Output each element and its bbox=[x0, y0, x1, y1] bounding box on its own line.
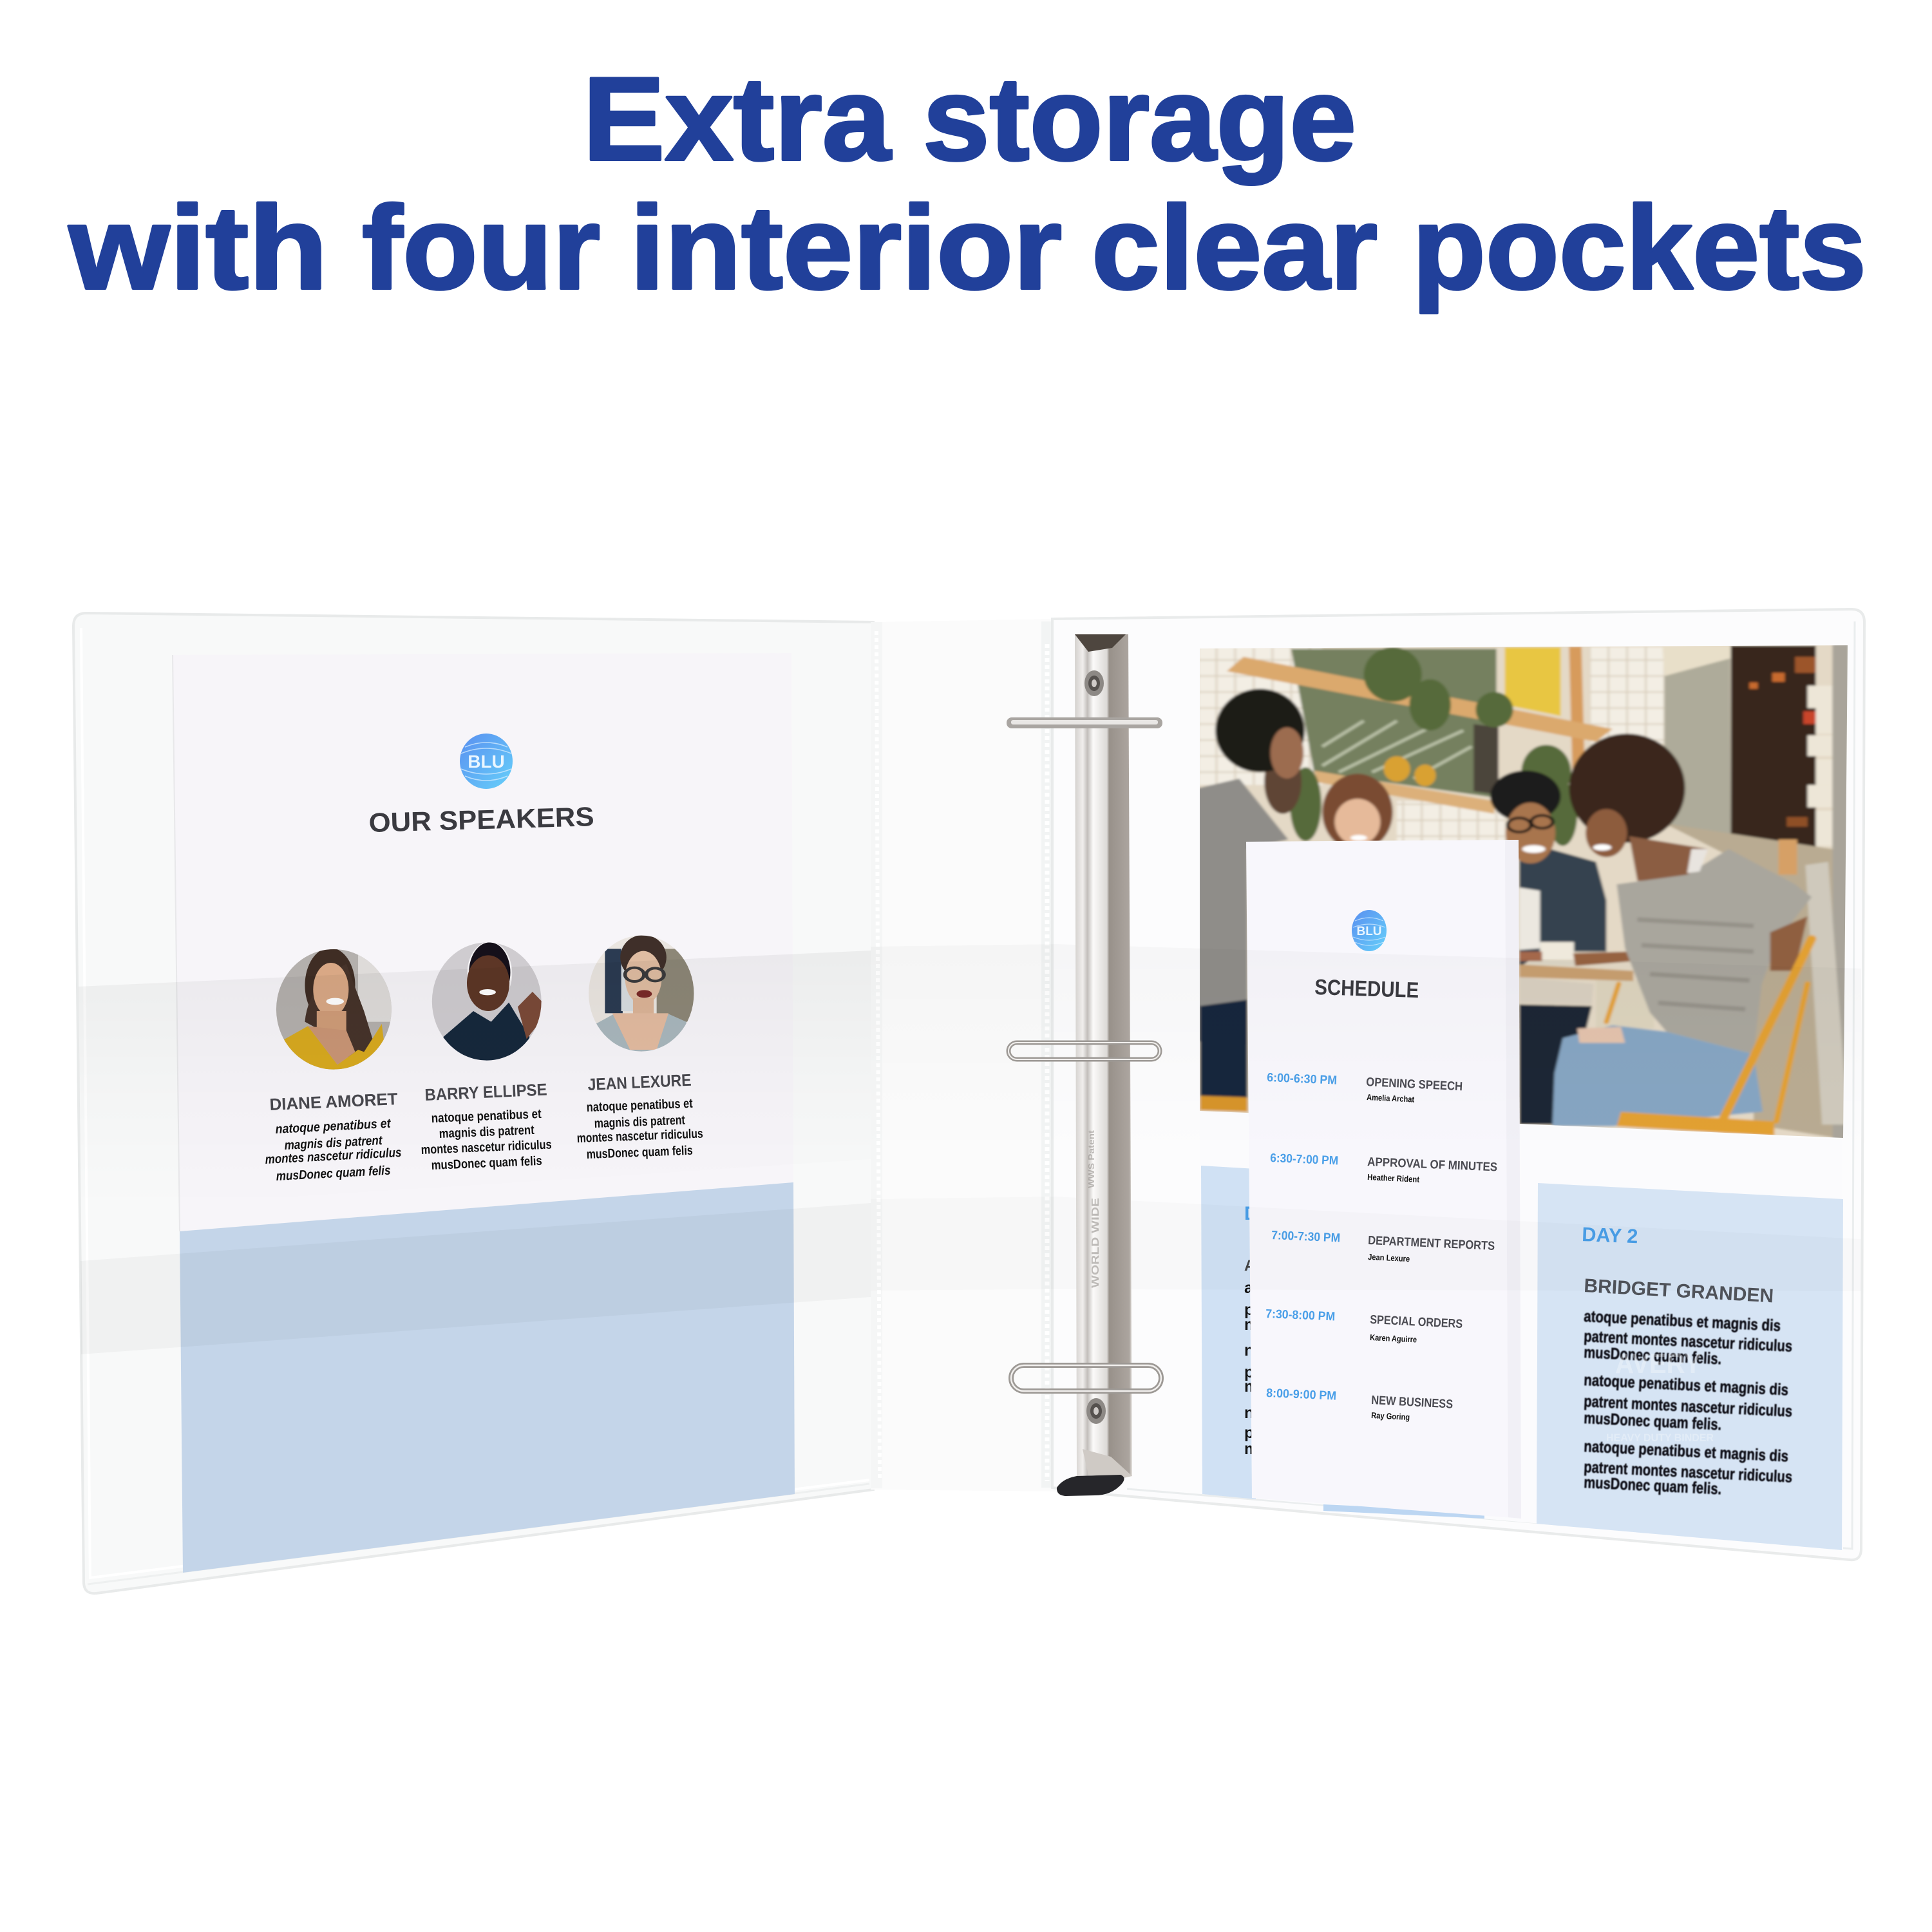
speaker text: Diane Amoret: natoque penatibus et bbox=[275, 1117, 392, 1137]
bottom clip bbox=[1083, 1449, 1132, 1479]
black lever bbox=[1057, 1475, 1124, 1496]
logo: BLU speakers bbox=[460, 734, 513, 789]
text: day 2 body: musDonec quam felis. bbox=[1584, 1409, 1722, 1434]
partial letters of day 1 column: D bbox=[1244, 1203, 1258, 1224]
partial letters of day 1 column: a bbox=[1244, 1279, 1254, 1297]
schedule row: opening speech bbox=[1267, 1071, 1463, 1104]
speaker text: Jean Lexure: montes nascetur ridiculus bbox=[576, 1126, 703, 1146]
heading: our speakers: OUR SPEAKERS bbox=[368, 801, 594, 838]
partial letters of day 1 column: m bbox=[1244, 1378, 1258, 1396]
schedule row: approval of minutes: 6:30-7:00 PM bbox=[1270, 1151, 1339, 1168]
speaker text: Barry Ellipse: montes nascetur ridiculus bbox=[421, 1138, 552, 1157]
schedule row: approval of minutes bbox=[1270, 1151, 1497, 1184]
schedule row: department reports: 7:00-7:30 PM bbox=[1271, 1229, 1341, 1245]
title: clear bbox=[1092, 181, 1378, 314]
blue block: day 1 bbox=[1201, 1166, 1256, 1499]
speaker text: Diane Amoret: DIANE AMORET bbox=[269, 1089, 398, 1114]
portrait: Barry Ellipse bbox=[431, 943, 542, 1061]
speaker text: Jean Lexure: musDonec quam felis bbox=[586, 1144, 693, 1162]
pocket bands bbox=[79, 944, 1861, 1354]
embossed binder branding: AVERY bbox=[1615, 1348, 1701, 1379]
binder ring mechanism bbox=[1007, 634, 1162, 1496]
schedule row: approval of minutes: APPROVAL OF MINUTES bbox=[1367, 1155, 1497, 1174]
schedule row: department reports: Jean Lexure bbox=[1368, 1252, 1410, 1264]
schedule row: new business bbox=[1266, 1387, 1454, 1422]
portrait: Jean Lexure bbox=[585, 934, 698, 1054]
schedule row: new business: Ray Goring bbox=[1371, 1410, 1410, 1422]
blue block: day 2 bbox=[1537, 1183, 1843, 1550]
text: day 2 body: patrent montes nascetur ridiculus bbox=[1584, 1327, 1793, 1356]
partial letters of day 1 column: p bbox=[1244, 1424, 1254, 1442]
rivet: bottom bbox=[1086, 1398, 1106, 1424]
speaker text: Diane Amoret bbox=[265, 1089, 402, 1184]
heading: schedule: SCHEDULE bbox=[1314, 975, 1419, 1003]
partial letters of day 1 column: m bbox=[1244, 1440, 1258, 1458]
bar emboss: WORLD WIDE bbox=[1090, 1198, 1101, 1288]
logo: BLU schedule: BLU bbox=[1356, 925, 1382, 938]
panel: agenda sheet bbox=[1198, 644, 1849, 1550]
speaker text: Jean Lexure: magnis dis patrent bbox=[594, 1113, 685, 1131]
cafe photo bbox=[1198, 644, 1849, 1146]
partial letters of day 1 column: p bbox=[1244, 1301, 1254, 1319]
speaker text: Diane Amoret: magnis dis patrent bbox=[284, 1133, 383, 1153]
text: day 2 body: patrent montes nascetur ridiculus bbox=[1584, 1458, 1793, 1486]
speaker text: Barry Ellipse: natoque penatibus et bbox=[431, 1107, 542, 1126]
rivet: top bbox=[1084, 670, 1104, 696]
ring: top bbox=[1007, 717, 1162, 728]
blue lower part of speakers sheet bbox=[180, 1182, 795, 1573]
partial letters of day 1 column: n bbox=[1244, 1341, 1254, 1359]
panel: spine bbox=[871, 619, 1056, 1492]
text: day 2 body: patrent montes nascetur ridiculus bbox=[1584, 1392, 1793, 1421]
embossed binder branding: HEAVY DUTY BINDER bbox=[1606, 1432, 1714, 1444]
schedule row: new business: 8:00-9:00 PM bbox=[1266, 1387, 1337, 1403]
bar emboss: WWS Patent bbox=[1086, 1130, 1096, 1188]
schedule row: special orders: Karen Aguirre bbox=[1370, 1332, 1417, 1345]
speaker text: Diane Amoret: montes nascetur ridiculus bbox=[265, 1146, 402, 1167]
bar top bevel bbox=[1075, 634, 1126, 652]
binder bbox=[73, 609, 1864, 1593]
metal bar bbox=[1075, 634, 1132, 1476]
schedule row: opening speech: OPENING SPEECH bbox=[1366, 1075, 1463, 1094]
partial letters of day 1 column: m bbox=[1244, 1316, 1258, 1334]
partial letters of day 1 column: p bbox=[1244, 1363, 1254, 1381]
embossed binder branding bbox=[1606, 1348, 1714, 1444]
speaker text: Jean Lexure: JEAN LEXURE bbox=[587, 1070, 692, 1094]
panel: speakers sheet bbox=[173, 653, 795, 1573]
text: day 2 body: musDonec quam felis. bbox=[1584, 1343, 1722, 1368]
schedule row: department reports: DEPARTMENT REPORTS bbox=[1368, 1234, 1495, 1253]
title bbox=[68, 52, 1866, 314]
title: with bbox=[68, 181, 328, 314]
title: storage bbox=[923, 52, 1356, 185]
panel: schedule card bbox=[1246, 840, 1521, 1519]
title: Extra bbox=[583, 52, 892, 185]
logo: BLU schedule bbox=[1352, 910, 1387, 951]
speaker text: Jean Lexure: natoque penatibus et bbox=[586, 1097, 693, 1115]
partial letters of day 1 column: n bbox=[1244, 1404, 1254, 1422]
partial letters of day 1 column bbox=[1244, 1203, 1258, 1458]
speaker text: Barry Ellipse bbox=[421, 1079, 552, 1173]
schedule row: new business: NEW BUSINESS bbox=[1371, 1394, 1454, 1412]
speaker text: Jean Lexure bbox=[576, 1070, 703, 1162]
schedule row: opening speech: 6:00-6:30 PM bbox=[1267, 1071, 1338, 1088]
blue sliver under schedule card bbox=[1323, 1504, 1484, 1519]
ring: bottom bbox=[1011, 1365, 1161, 1391]
schedule row: special orders: 7:30-8:00 PM bbox=[1265, 1307, 1336, 1324]
panel: left inside cover bbox=[73, 613, 873, 1593]
title: interior bbox=[630, 181, 1062, 314]
schedule row: special orders: SPECIAL ORDERS bbox=[1370, 1313, 1463, 1331]
text: day 2 body: atoque penatibus et magnis dis bbox=[1584, 1307, 1781, 1335]
text: day 2 body: musDonec quam felis. bbox=[1584, 1473, 1722, 1498]
schedule row: approval of minutes: Heather Rident bbox=[1367, 1172, 1420, 1184]
speaker text: Barry Ellipse: BARRY ELLIPSE bbox=[424, 1079, 547, 1104]
title: pockets bbox=[1412, 181, 1866, 314]
portrait: Diane Amoret bbox=[276, 949, 392, 1070]
logo: BLU speakers: BLU bbox=[468, 752, 505, 772]
speaker text: Diane Amoret: musDonec quam felis bbox=[276, 1164, 391, 1184]
text: day 2 body bbox=[1584, 1307, 1793, 1498]
text: Bridget Granden: BRIDGET GRANDEN bbox=[1584, 1275, 1774, 1307]
text: day 2 heading: DAY 2 bbox=[1582, 1223, 1638, 1247]
title: four bbox=[362, 181, 600, 314]
ring: middle bbox=[1009, 1043, 1160, 1059]
panel: right inside cover bbox=[1052, 609, 1864, 1560]
partial letters of day 1 column: A bbox=[1244, 1257, 1255, 1274]
schedule row: special orders bbox=[1265, 1307, 1463, 1345]
schedule row: department reports bbox=[1271, 1229, 1495, 1264]
schedule row: opening speech: Amelia Archat bbox=[1367, 1092, 1415, 1104]
bar emboss bbox=[1086, 1130, 1101, 1288]
text: day 2 body: natoque penatibus et magnis dis bbox=[1584, 1371, 1789, 1399]
text: day 2 body: natoque penatibus et magnis dis bbox=[1584, 1437, 1789, 1466]
speaker text: Barry Ellipse: magnis dis patrent bbox=[439, 1123, 535, 1141]
speaker text: Barry Ellipse: musDonec quam felis bbox=[431, 1154, 542, 1173]
